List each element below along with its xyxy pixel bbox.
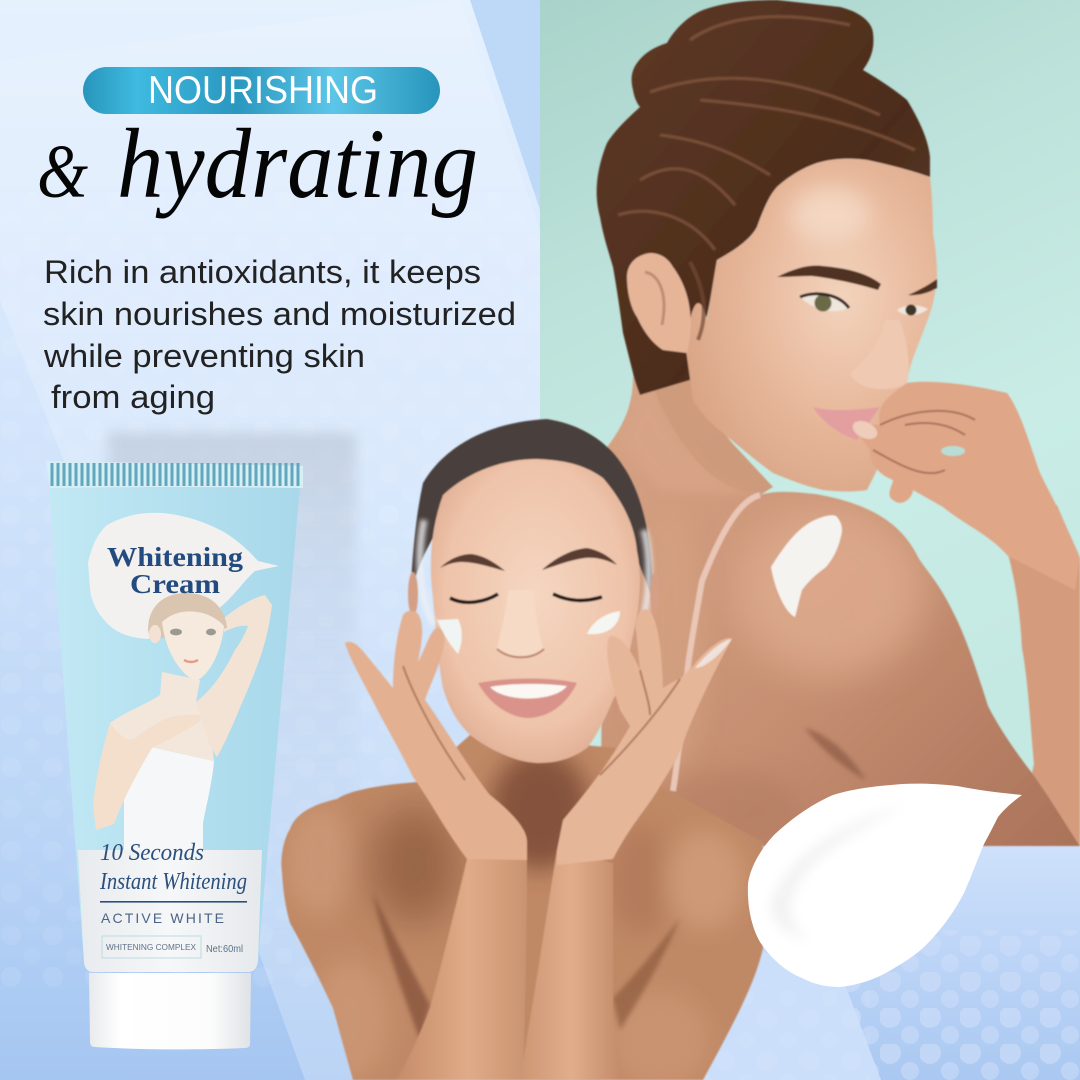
gap in fingers	[941, 446, 965, 456]
speech bubble	[88, 513, 279, 639]
body text	[43, 254, 516, 415]
crimped top	[46, 461, 303, 488]
product: cream tube	[46, 461, 303, 1049]
bra strap	[673, 495, 760, 791]
product: cream tube: Cream	[130, 569, 221, 599]
left forearm	[397, 842, 527, 1080]
product: cream tube: 10 Seconds	[100, 840, 204, 866]
heading: & hydrating: hydrating	[117, 108, 478, 219]
shadow behind tube	[108, 432, 356, 932]
hand at mouth	[853, 382, 1080, 590]
wisps over temple	[690, 262, 704, 340]
panel: left blue background	[0, 0, 540, 1080]
smile	[478, 678, 577, 718]
lips	[813, 407, 880, 440]
body text: Rich in antioxidants, it keeps	[44, 254, 481, 290]
heading pill: NOURISHING: NOURISHING	[148, 69, 378, 112]
body text: while preventing skin	[43, 338, 365, 374]
ears	[408, 572, 660, 616]
panel: mint photo background	[540, 0, 1080, 845]
fingernail	[850, 417, 880, 443]
finger lines	[403, 666, 680, 780]
cream on shoulder	[771, 515, 842, 617]
chest skin	[110, 672, 214, 761]
back and shoulder	[590, 350, 1080, 850]
left hand	[345, 611, 527, 860]
right forearm	[520, 850, 623, 1080]
cream around hairline	[420, 520, 434, 625]
neck shade	[650, 353, 773, 492]
panel: bottom right blue dotted background	[540, 844, 1080, 1080]
body text: from aging	[51, 379, 215, 415]
illustrated woman	[93, 593, 272, 850]
product: cream tube: WHITENING COMPLEX	[106, 942, 196, 952]
torso	[270, 720, 780, 1080]
tube cap	[89, 973, 251, 1049]
hair	[411, 419, 652, 600]
cream dabs on cheeks	[437, 619, 462, 654]
product: cream tube: Instant Whitening	[99, 869, 247, 895]
right hand	[557, 609, 732, 865]
eyes and lips	[170, 629, 182, 635]
nose highlight	[850, 320, 909, 389]
body text: skin nourishes and moisturized	[43, 296, 516, 332]
hair	[148, 593, 227, 640]
lower arm and hand	[93, 715, 200, 830]
photo: woman touching her shoulder	[590, 0, 1080, 850]
photo: smiling woman applying cream	[270, 419, 780, 1080]
right arm	[1008, 505, 1080, 846]
product: cream tube: ACTIVE WHITE	[101, 910, 224, 926]
tube body	[49, 486, 300, 972]
hair highlights	[618, 17, 915, 250]
heading: & hydrating: &	[37, 130, 88, 214]
nose	[497, 590, 543, 657]
eyebrows	[440, 554, 505, 571]
dress	[119, 740, 214, 850]
bun and hair	[597, 0, 930, 395]
heading pill: NOURISHING	[83, 67, 440, 114]
eyes	[800, 295, 848, 311]
finger lines	[873, 411, 975, 473]
crimp stripes	[52, 463, 298, 486]
tube label text: Whitening	[107, 542, 244, 572]
raised arm	[196, 595, 272, 757]
face	[431, 459, 640, 763]
eyebrows	[777, 265, 881, 290]
ear	[149, 625, 161, 643]
pale fingernail	[695, 639, 732, 668]
ear	[627, 253, 691, 353]
product: cream tube: Net:60ml	[206, 944, 243, 955]
face	[162, 611, 224, 681]
face	[686, 159, 937, 492]
cream swatch	[748, 784, 1022, 987]
white lower label	[78, 850, 262, 972]
forehead highlight	[790, 187, 870, 243]
closed eyes	[450, 594, 498, 602]
cream inner shading	[770, 805, 905, 940]
